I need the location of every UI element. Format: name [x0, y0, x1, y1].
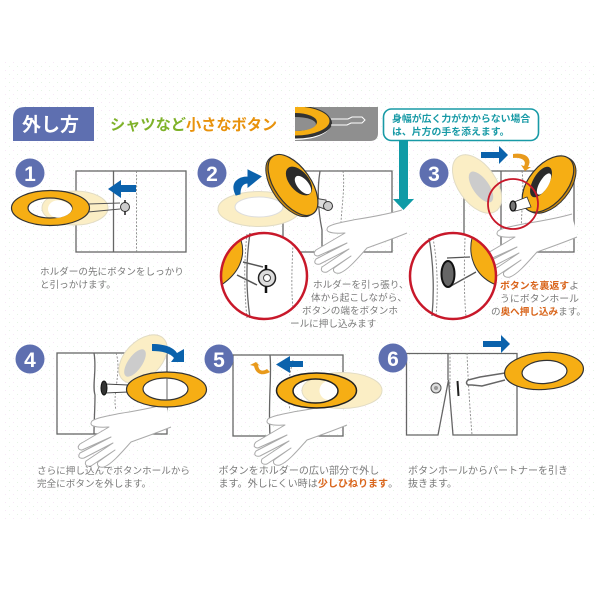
arrow orange twist 5 [250, 362, 270, 374]
number badge 6: 6 [387, 348, 399, 371]
holder 6 [466, 350, 585, 392]
ghost holder 3 [443, 146, 511, 222]
arrow: teal callout pointer [393, 140, 414, 210]
arrow left 1 [108, 180, 136, 198]
step 5 [204, 344, 398, 490]
number badge 4: 4 [24, 349, 36, 372]
caption 3: うにボタンホール [500, 293, 579, 305]
number badge 4 [16, 344, 44, 374]
callout: note about hand [384, 109, 538, 140]
holder 5 [276, 373, 356, 408]
shirt 2 [283, 171, 392, 252]
button and holder 2 [314, 198, 332, 210]
holder 1 [12, 190, 130, 226]
number badge 5: 5 [213, 349, 225, 372]
caption 5: ます。外しにくい時は少しひねります。 [218, 479, 398, 490]
shirt 3 [464, 171, 574, 252]
heading: shirt small buttons: シャツなど小さなボタン [110, 117, 277, 134]
caption 3: の奥へ押し込みます。 [491, 307, 586, 318]
arrow right 6 [483, 335, 510, 353]
arrow curved 2 [234, 170, 261, 195]
step 3 [410, 146, 586, 319]
caption 5: ボタンをホルダーの広い部分で外し [218, 464, 379, 477]
arrow orange turn 3 [513, 154, 531, 171]
number badge 5 [204, 344, 234, 374]
caption 2: ールに押し込みます [290, 318, 376, 330]
ghost holder 4 [110, 326, 176, 392]
number badge 1: 1 [24, 163, 36, 186]
step 2 [198, 146, 409, 330]
number badge 2: 2 [206, 163, 218, 186]
ghost holder 2 [218, 192, 300, 226]
holder ring 2 [256, 146, 328, 225]
large magnifier 3 [410, 233, 500, 319]
caption 1: ホルダーの先にボタンをしっかり [40, 266, 184, 278]
magnifier 2 [210, 233, 307, 319]
caption 2: 体から起こしながら、 [311, 292, 407, 304]
buttonhole 6 [458, 381, 459, 396]
hand 2 [314, 210, 407, 273]
caption 2: ホルダーを引っ張り、 [313, 279, 409, 291]
number badge 3: 3 [428, 163, 440, 186]
ghost holder 1 [42, 191, 108, 225]
number badge 1 [16, 158, 44, 188]
shirt 4 [57, 353, 167, 434]
caption 4: 完全にボタンを外します。 [37, 478, 151, 490]
hand 5 [254, 402, 347, 465]
heading: 外し方 label: 外し方 [22, 113, 79, 136]
step 1 [12, 158, 186, 291]
shirt 5 [233, 355, 343, 436]
caption 4: さらに押し込んでボタンホールから [37, 465, 190, 477]
number badge 6 [378, 344, 408, 372]
shirt 1 [76, 171, 186, 252]
hand 3 [484, 214, 577, 277]
heading: 外し方 label [13, 107, 94, 141]
step 6 [378, 335, 585, 490]
caption 6: ボタンホールからパートナーを引き [408, 465, 568, 477]
number badge 2 [198, 158, 226, 188]
button 6 [431, 383, 441, 393]
holder ring 3 [512, 147, 586, 223]
number badge 3 [420, 158, 448, 188]
hand 4 [78, 404, 171, 467]
icon: gray panel with partner tool [295, 107, 378, 141]
step 4 [16, 326, 206, 490]
shirt 6 [406, 353, 517, 435]
arrow right 3 [481, 146, 508, 164]
callout: note about hand: は、片方の手を添えます。 [392, 125, 510, 138]
caption 6: 抜きます。 [408, 477, 457, 490]
ghost holder 5 [302, 372, 382, 408]
holder and button 4 [101, 372, 206, 407]
callout: note about hand: 身幅が広く力がかからない場合 [392, 112, 530, 125]
arrow curved 4 [152, 344, 184, 362]
caption 1: と引っかけます。 [40, 280, 116, 291]
caption 3: ボタンを裏返すよ [500, 281, 579, 292]
caption 2: ボタンの端をボタンホ [302, 305, 398, 317]
arrow left 5 [276, 356, 303, 373]
small magnifier 3 [488, 179, 538, 229]
